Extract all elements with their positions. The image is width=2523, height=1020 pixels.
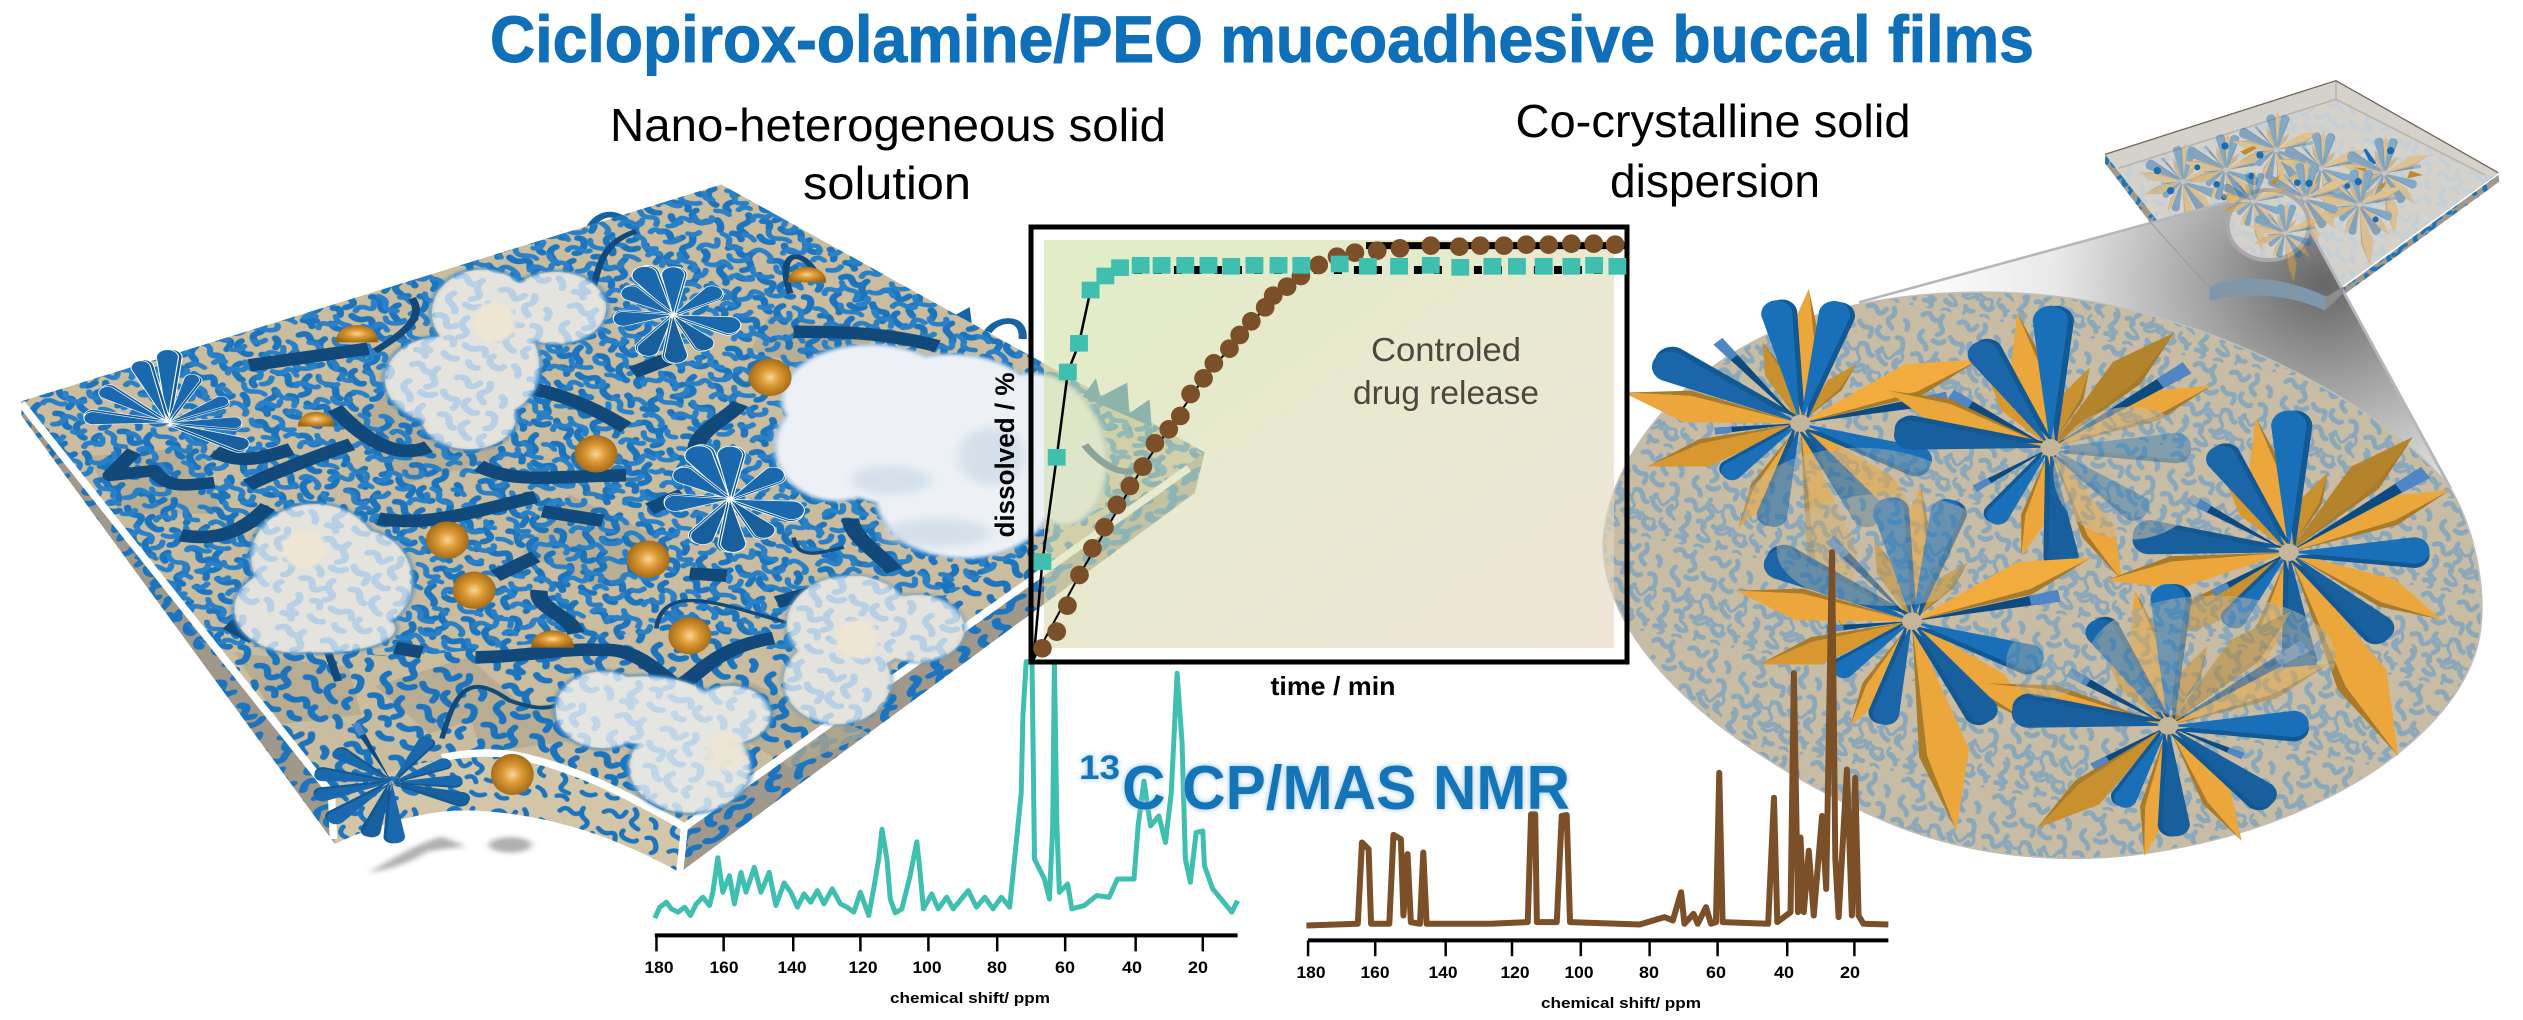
axis labels: brown spectrum: 100 bbox=[1564, 963, 1594, 982]
magnified matrix ellipse bbox=[1603, 292, 2482, 858]
inset cut-out circle bbox=[2228, 190, 2309, 260]
shadow under notch bbox=[368, 837, 532, 873]
cloud: amorphous domain top bbox=[378, 266, 612, 453]
white slab edges bbox=[21, 404, 1189, 873]
brown series markers bbox=[1033, 234, 1625, 658]
axis labels: teal spectrum: chemical shift/ ppm bbox=[890, 990, 1050, 1007]
axis labels: brown spectrum: 160 bbox=[1360, 963, 1390, 982]
ribbons behind slab edge bbox=[589, 215, 1023, 339]
title: Ciclopirox-olamine/PEO mucoadhesive buccal films bbox=[490, 2, 2034, 76]
crystalline flowers bbox=[83, 262, 807, 844]
slab ribbon spikes seen through chart bbox=[1083, 378, 1152, 471]
inset back walls bbox=[2105, 81, 2498, 175]
teal axis bbox=[655, 935, 1238, 951]
panel: co-crystalline film magnified bbox=[1603, 202, 2482, 858]
panel: nano-heterogeneous film slab bbox=[0, 150, 1205, 873]
brown axis bbox=[1308, 940, 1888, 956]
inset right side strip bbox=[2343, 173, 2499, 295]
crystal flower 3 bbox=[2103, 411, 2456, 765]
slab right side bbox=[680, 452, 1205, 873]
cloud: domain left bbox=[228, 500, 418, 656]
NMR heading: C CP/MAS NMR bbox=[1122, 754, 1570, 823]
axis labels: teal spectrum: 20 bbox=[1188, 958, 1208, 977]
heading: co-crystalline solid dispersion: dispersion bbox=[1610, 155, 1820, 207]
brown spectrum line bbox=[1306, 552, 1888, 925]
drug spheres bbox=[298, 267, 826, 795]
axis labels: teal spectrum: 40 bbox=[1122, 958, 1142, 977]
axis labels: teal spectrum: 180 bbox=[644, 958, 674, 977]
axis labels: teal spectrum: 60 bbox=[1055, 958, 1075, 977]
inset left edge line bbox=[2148, 220, 2208, 287]
funnel magnification cone bbox=[1859, 202, 2451, 519]
inset saturated petal tips bbox=[2154, 142, 2394, 222]
notch wall bbox=[2209, 279, 2327, 311]
axis labels: teal spectrum bbox=[644, 958, 1208, 1007]
chart: dissolution release bbox=[990, 227, 1627, 701]
heading: co-crystalline solid dispersion bbox=[1516, 95, 1910, 207]
crystal flower 5 bbox=[1980, 584, 2336, 858]
cloud: domain bottom bbox=[550, 668, 776, 817]
crystal flower 4 bbox=[1731, 486, 2098, 834]
axis labels: teal spectrum: 120 bbox=[848, 958, 878, 977]
axis labels: brown spectrum: 140 bbox=[1428, 963, 1458, 982]
translucent washes bbox=[1777, 407, 2336, 718]
axis labels: brown spectrum: 120 bbox=[1500, 963, 1530, 982]
inset orange petal tips bbox=[2240, 146, 2423, 188]
x axis label: time / min bbox=[1270, 671, 1396, 701]
axis labels: brown spectrum: 80 bbox=[1639, 963, 1659, 982]
heading: nano-heterogeneous solid solution: solution bbox=[803, 157, 971, 209]
teal series markers bbox=[1033, 256, 1626, 570]
y axis label: dissolved / % bbox=[990, 372, 1020, 538]
axis labels: brown spectrum: 180 bbox=[1296, 963, 1326, 982]
heading: nano-heterogeneous solid solution: Nano-heterogeneous solid bbox=[610, 99, 1166, 151]
chart frame bbox=[1031, 227, 1627, 662]
chart: 13C spectrum co-crystalline (brown) bbox=[1306, 552, 1888, 956]
black lines and stars bbox=[1033, 246, 1625, 660]
inset floor bbox=[2105, 81, 2498, 297]
inset notch and cut-out over funnel bbox=[2148, 170, 2343, 311]
axis labels: brown spectrum: 40 bbox=[1774, 963, 1794, 982]
chart background bbox=[1044, 240, 1614, 648]
chart series bbox=[1033, 234, 1626, 660]
teal spectrum line bbox=[655, 662, 1238, 918]
axis labels: brown spectrum: 60 bbox=[1706, 963, 1726, 982]
inset pale flowers bbox=[2138, 111, 2430, 266]
chart annotation bbox=[1353, 331, 1539, 411]
NMR heading: 13 bbox=[1079, 749, 1120, 787]
slab left side bbox=[21, 401, 335, 844]
chart annotation: drug release bbox=[1353, 374, 1539, 411]
inset left side strip bbox=[2105, 154, 2210, 301]
axis labels: teal spectrum: 140 bbox=[778, 958, 806, 977]
polymer ribbons bbox=[111, 231, 938, 739]
axis labels: brown spectrum: chemical shift/ ppm bbox=[1541, 995, 1701, 1012]
axis labels: teal spectrum: 160 bbox=[710, 958, 738, 977]
chart: 13C spectrum amorphous (teal) bbox=[655, 662, 1238, 951]
axis labels: teal spectrum: 100 bbox=[912, 958, 942, 977]
heading: nano-heterogeneous solid solution bbox=[610, 99, 1166, 209]
translucent wash over flower 1 bbox=[1741, 448, 1977, 580]
axis labels: brown spectrum: 20 bbox=[1840, 963, 1860, 982]
chart annotation: Controled bbox=[1371, 331, 1521, 368]
cloud: domain right bbox=[778, 572, 970, 728]
inset film slab bbox=[2105, 81, 2499, 301]
flowers in cut-out bbox=[2216, 170, 2323, 283]
cloud: large opaque domain bbox=[777, 346, 1105, 557]
axis labels: teal spectrum: 80 bbox=[987, 958, 1007, 977]
slab top face bbox=[22, 184, 1205, 822]
notch front bbox=[332, 753, 683, 873]
crystal flower 2 bbox=[1879, 306, 2218, 586]
heading: co-crystalline solid dispersion: Co-crystalline solid bbox=[1516, 95, 1910, 147]
crystal flower 1 bbox=[1619, 288, 1986, 636]
axis labels: brown spectrum bbox=[1296, 963, 1860, 1012]
